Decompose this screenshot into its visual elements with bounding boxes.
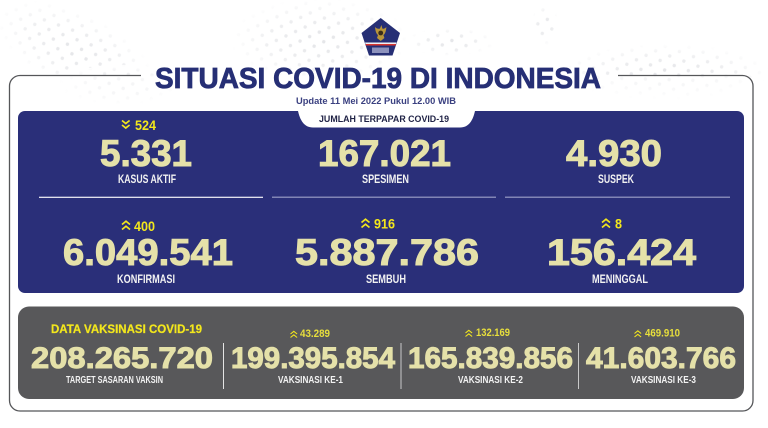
stat: spesimen: SPESIMEN: [362, 174, 409, 186]
stat: konfirmasi: 400: [134, 218, 155, 234]
stat: sembuh: 5.887.786: [295, 232, 479, 273]
title: SITUASI COVID-19 DI INDONESIA: [155, 63, 601, 95]
stat: sembuh: [295, 216, 479, 286]
outer frame: [10, 76, 753, 411]
stat: konfirmasi: [63, 218, 233, 286]
stat: sembuh: 916: [374, 216, 395, 232]
icon: national task force logo: [362, 18, 400, 56]
stat: meninggal: 156.424: [547, 232, 696, 273]
stat: target sasaran vaksin: DATA VAKSINASI COVID-19: [51, 322, 202, 336]
stat: vaksinasi ke-3: VAKSINASI KE-3: [631, 374, 696, 386]
stat: vaksinasi ke-1: 43.289: [300, 328, 330, 340]
stat: target sasaran vaksin: TARGET SASARAN VAKSIN: [66, 374, 163, 386]
stat: vaksinasi ke-2: 165.839.856: [408, 342, 573, 375]
stat: sembuh: SEMBUH: [366, 274, 406, 286]
stat: vaksinasi ke-1: [231, 328, 395, 386]
stat: vaksinasi ke-1: VAKSINASI KE-1: [278, 374, 343, 386]
stat: konfirmasi: KONFIRMASI: [117, 274, 175, 286]
stat: vaksinasi ke-2: 132.169: [476, 327, 510, 339]
stat: kasus aktif: KASUS AKTIF: [118, 174, 176, 186]
stat: vaksinasi ke-2: VAKSINASI KE-2: [458, 374, 523, 386]
stat: target sasaran vaksin: [31, 322, 213, 386]
stat: meninggal: 8: [615, 216, 622, 232]
stat: vaksinasi ke-2: [408, 327, 573, 386]
stat: kasus aktif: 524: [135, 117, 156, 133]
tab: jumlah terpapar: [298, 111, 475, 128]
tab: jumlah terpapar: JUMLAH TERPAPAR COVID-19: [319, 114, 449, 125]
stat: meninggal: [547, 216, 696, 286]
stat: meninggal: MENINGGAL: [592, 274, 648, 286]
stat: spesimen: 167.021: [318, 133, 451, 174]
panel: vaccination data: [18, 306, 744, 399]
stat: kasus aktif: 5.331: [100, 133, 192, 174]
update date text: Update 11 Mei 2022 Pukul 12.00 WIB: [296, 96, 456, 107]
stat: vaksinasi ke-3: 469.910: [645, 328, 680, 340]
stat: target sasaran vaksin: 208.265.720: [31, 342, 213, 375]
stat: vaksinasi ke-3: 41.603.766: [586, 342, 736, 375]
stat: suspek: SUSPEK: [598, 174, 635, 186]
stat: suspek: 4.930: [566, 133, 662, 174]
stat: vaksinasi ke-1: 199.395.854: [231, 342, 395, 375]
background halftone dots: [14, 7, 746, 94]
panel: exposure statistics: [18, 111, 744, 293]
stat: vaksinasi ke-3: [586, 328, 736, 386]
stat: kasus aktif: [100, 117, 192, 186]
stat: konfirmasi: 6.049.541: [63, 232, 233, 273]
